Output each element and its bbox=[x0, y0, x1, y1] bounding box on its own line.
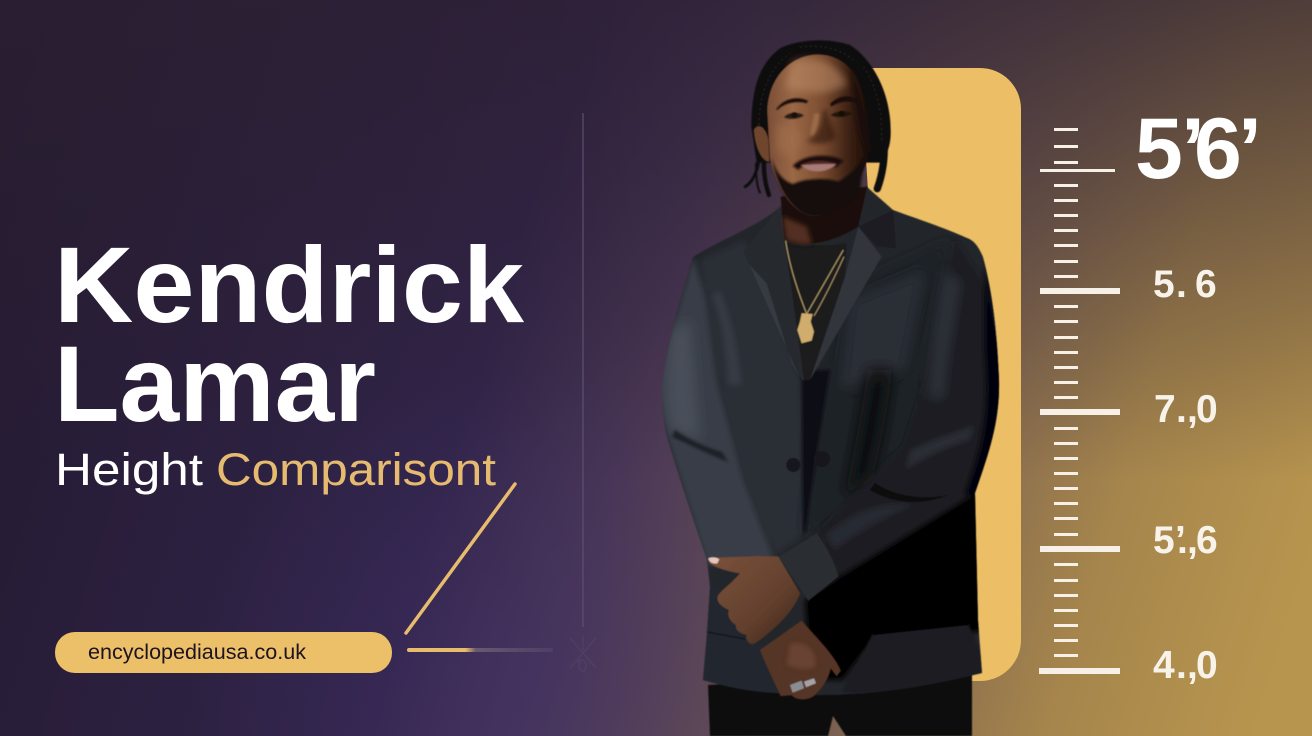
face bbox=[767, 55, 868, 216]
lips bbox=[801, 163, 837, 171]
neck bbox=[781, 187, 867, 244]
left sleeve tone bbox=[655, 257, 775, 565]
height value: 5'6" headline: 5’6’ bbox=[1135, 101, 1262, 197]
icon: faint watermark bbox=[570, 636, 596, 672]
eyes bbox=[784, 113, 804, 119]
gold height panel bbox=[860, 68, 1021, 681]
subtitle: Height Comparison: Comparisont bbox=[216, 444, 497, 495]
height ruler bbox=[1039, 128, 1120, 674]
ruler labels bbox=[1153, 263, 1218, 687]
upper hand bbox=[708, 556, 800, 644]
ruler labels: 5. 6 bbox=[1153, 263, 1217, 306]
nose shadow bbox=[806, 110, 836, 144]
subtitle: Height Comparison: Height bbox=[55, 444, 204, 495]
subtitle: Height Comparison bbox=[55, 444, 497, 495]
beard bbox=[772, 157, 864, 217]
buttons bbox=[786, 458, 800, 472]
ruler labels: 7.,0 bbox=[1154, 388, 1218, 431]
buttons, cuff and hands bbox=[708, 451, 841, 699]
ear bbox=[754, 126, 769, 162]
hem left bbox=[720, 685, 778, 694]
left chest tone bbox=[700, 240, 806, 555]
left lapel bbox=[743, 206, 804, 380]
right lapel bbox=[810, 227, 882, 380]
hair bbox=[751, 40, 891, 163]
jacket bbox=[650, 180, 1010, 710]
faint vertical divider bbox=[582, 113, 584, 627]
diagonal gold accent line bbox=[406, 484, 515, 633]
right chest tone bbox=[806, 240, 950, 533]
person portrait bbox=[650, 40, 1010, 736]
trousers bbox=[708, 670, 972, 736]
lower hand bbox=[760, 621, 841, 699]
pendant bbox=[797, 313, 814, 343]
shirt, lapels and chain bbox=[743, 40, 896, 380]
hair braid texture bbox=[759, 46, 882, 143]
eyebrows bbox=[776, 98, 808, 110]
title: Kendrick Lamar: Lamar bbox=[54, 323, 376, 444]
ruler labels: 4.,0 bbox=[1153, 644, 1218, 687]
website pill bbox=[55, 632, 392, 673]
title: Kendrick Lamar: Kendrick bbox=[54, 224, 525, 345]
t-shirt bbox=[784, 237, 847, 380]
horizontal fading line bbox=[407, 648, 553, 652]
necklaces bbox=[786, 241, 844, 316]
minor ticks bbox=[1054, 128, 1078, 657]
cuff bbox=[779, 533, 838, 601]
hem right bbox=[842, 624, 990, 693]
website pill: encyclopediausa.co.uk bbox=[88, 641, 306, 664]
rings bbox=[790, 681, 804, 693]
right sleeve tone bbox=[817, 240, 1000, 577]
dark lower body bbox=[805, 493, 1000, 680]
center opening bbox=[802, 370, 830, 533]
major ticks bbox=[1039, 169, 1120, 674]
ruler labels: 5’.,6 bbox=[1153, 519, 1218, 562]
title: Kendrick Lamar bbox=[54, 224, 525, 444]
